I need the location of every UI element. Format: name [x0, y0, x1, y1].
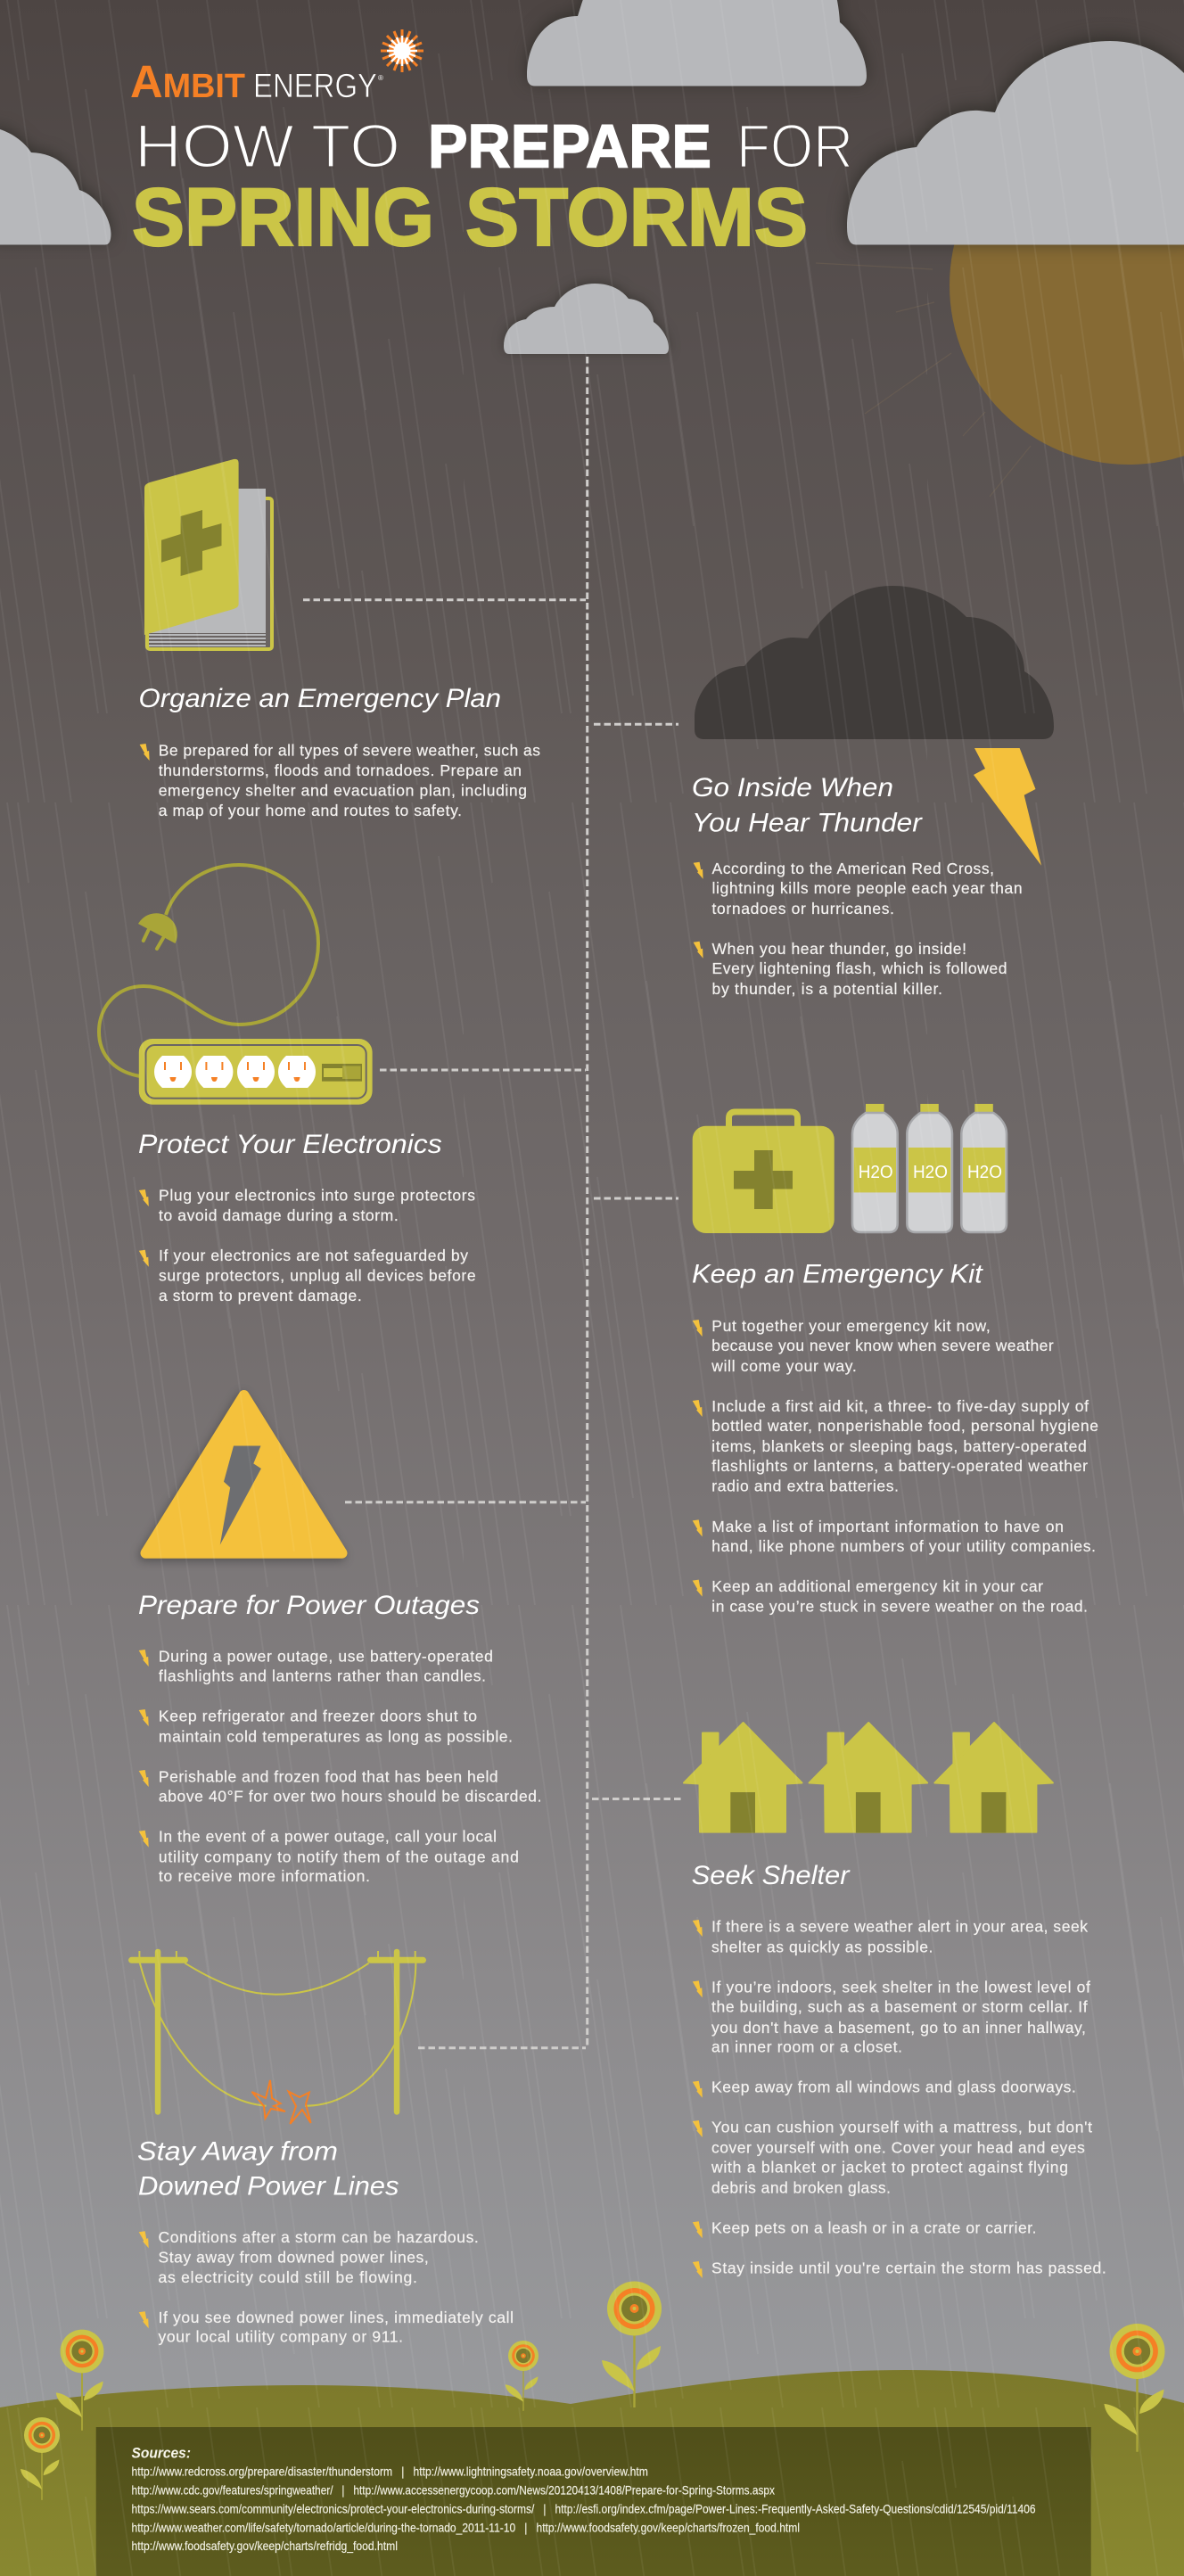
- heading: Go Inside When: [692, 773, 893, 802]
- logo: Ambit Energy: [130, 29, 423, 107]
- flower: [602, 2281, 662, 2407]
- bullet: During a power outage, use battery-operated: [159, 1647, 493, 1665]
- cloud: top center: [527, 0, 867, 86]
- sources list: http://www.cdc.gov/features/springweather/ | http://www.accessenergycoop.com/News/20120413/1408/Prepare-for-Spring-Storms.aspx: [132, 2483, 775, 2498]
- bullet: a map of your home and routes to safety.: [159, 802, 462, 819]
- bullet: will come your way.: [711, 1357, 857, 1375]
- bullet: the building, such as a basement or storm cellar. If: [711, 1998, 1088, 2016]
- sources list: https://www.sears.com/community/electronics/protect-your-electronics-during-storms/ | http://esfi.org/index.cfm/page/Power-Lines:-Frequently-Asked-Safety-Questions/cdid/12545/pid/11406: [132, 2501, 1036, 2515]
- bullet: a storm to prevent damage.: [159, 1287, 362, 1304]
- icon: warning triangle: [146, 1395, 342, 1553]
- flower: [56, 2330, 103, 2431]
- bullet: [139, 1767, 541, 1806]
- bullet: [693, 1918, 1088, 1956]
- bullet: lightning kills more people each year than: [711, 879, 1023, 897]
- bullet: flashlights and lanterns rather than candles.: [159, 1667, 486, 1685]
- bullet: If your electronics are not safeguarded by: [159, 1247, 468, 1264]
- panel: organize an emergency plan: [139, 459, 540, 819]
- bullet: Plug your electronics into surge protectors: [159, 1187, 475, 1205]
- bullet: According to the American Red Cross,: [711, 860, 994, 877]
- bullet: [139, 2228, 479, 2286]
- panel: stay away from downed power lines: [128, 1949, 514, 2346]
- icon: utility poles and wires: [128, 1949, 426, 2124]
- heading: You Hear Thunder: [692, 809, 923, 838]
- bullet: surge protectors, unplug all devices before: [159, 1267, 476, 1285]
- sources list: http://www.redcross.org/prepare/disaster/thunderstorm | http://www.lightningsafety.noaa.gov/overview.htm: [132, 2465, 648, 2479]
- bullet: as electricity could still be flowing.: [159, 2268, 417, 2286]
- bullet: Keep away from all windows and glass doorways.: [711, 2078, 1076, 2096]
- panel: keep an emergency kit: [692, 1104, 1098, 1616]
- bullet: You can cushion yourself with a mattress, but don't: [711, 2118, 1092, 2136]
- bullet: [140, 742, 540, 819]
- bullet: radio and extra batteries.: [711, 1477, 899, 1495]
- bullet: to receive more information.: [159, 1867, 370, 1885]
- bullet: tornadoes or hurricanes.: [711, 900, 894, 918]
- flower: [506, 2341, 539, 2411]
- bullet: Conditions after a storm can be hazardous.: [159, 2228, 479, 2246]
- bullet: shelter as quickly as possible.: [711, 1938, 933, 1956]
- bullet: Make a list of important information to have on: [711, 1518, 1064, 1535]
- flower: [21, 2417, 60, 2500]
- bullet: emergency shelter and evacuation plan, including: [159, 782, 527, 800]
- heading: Organize an Emergency Plan: [139, 684, 501, 713]
- sun: [816, 106, 1184, 497]
- logo: Ambit Energy: ®: [378, 74, 383, 82]
- bullet: in case you’re stuck in severe weather on the road.: [711, 1598, 1088, 1616]
- bullet: [693, 1317, 1054, 1375]
- bullet: [693, 1577, 1088, 1616]
- icon: first aid kit: [693, 1112, 835, 1233]
- bullet: flashlights or lanterns, a battery-operated weather: [711, 1457, 1088, 1475]
- logo wordmark: AMBIT: [130, 56, 245, 107]
- heading: Seek Shelter: [692, 1861, 851, 1890]
- bullet: utility company to notify them of the outage and: [159, 1848, 519, 1865]
- bullet: If you’re indoors, seek shelter in the lowest level of: [711, 1978, 1090, 1996]
- flower: [1104, 2324, 1164, 2452]
- bullet: Every lightening flash, which is followed: [711, 959, 1007, 977]
- sources list: http://www.foodsafety.gov/keep/charts/refridg_food.html: [132, 2539, 398, 2553]
- cloud: left: [0, 129, 111, 244]
- bullet: hand, like phone numbers of your utility companies.: [711, 1537, 1096, 1555]
- hill: [0, 2370, 1184, 2576]
- panel: prepare for power outages: [138, 1395, 542, 1885]
- bullet: [139, 1707, 513, 1745]
- panel: protect your electronics: [99, 865, 476, 1304]
- bullet: [139, 1187, 475, 1224]
- icon: lightning bolt: [974, 748, 1041, 866]
- icon: surge protector: [99, 865, 373, 1105]
- logo sun mark: [381, 29, 423, 72]
- bullet: bottled water, nonperishable food, personal hygiene: [711, 1417, 1098, 1435]
- bullet: by thunder, is a potential killer.: [711, 980, 942, 998]
- bullet: maintain cold temperatures as long as possible.: [159, 1727, 513, 1745]
- cloud: top right: [847, 41, 1184, 244]
- bullet: When you hear thunder, go inside!: [711, 940, 966, 958]
- bullet: [693, 1978, 1090, 2055]
- heading: Protect Your Electronics: [138, 1130, 442, 1159]
- sources list: http://www.weather.com/life/safety/tornado/article/during-the-tornado_2011-11-10 | http://www.foodsafety.gov/keep/charts/frozen_food.html: [132, 2520, 800, 2534]
- heading: Keep an Emergency Kit: [692, 1260, 983, 1289]
- bullet: Keep refrigerator and freezer doors shut to: [159, 1707, 477, 1724]
- icon: water bottles: H2O: [859, 1163, 893, 1182]
- icon: three houses: [684, 1723, 1053, 1833]
- bullet: with a blanket or jacket to protect against flying: [711, 2159, 1068, 2177]
- bullet: Put together your emergency kit now,: [711, 1317, 991, 1335]
- heading: [137, 2137, 399, 2202]
- icon: storm cloud: [695, 586, 1054, 739]
- sources heading: Sources:: [132, 2446, 191, 2462]
- bullet: Be prepared for all types of severe weather, such as: [159, 742, 540, 760]
- bullet: Keep pets on a leash or in a crate or carrier.: [711, 2219, 1036, 2237]
- bullet: [139, 1647, 493, 1685]
- bullet: an inner room or a closet.: [711, 2037, 902, 2055]
- title: STORMS: [465, 172, 808, 263]
- bullet: In the event of a power outage, call your local: [159, 1827, 497, 1845]
- bullet: debris and broken glass.: [711, 2178, 891, 2196]
- title: FOR: [736, 112, 853, 180]
- heading: Prepare for Power Outages: [138, 1591, 480, 1620]
- bullet: to avoid damage during a storm.: [159, 1206, 399, 1224]
- panel: go inside when you hear thunder: [692, 586, 1054, 998]
- icon: sparks: [251, 2080, 311, 2124]
- title: PREPARE: [428, 112, 711, 180]
- bullet: because you never know when severe weather: [711, 1337, 1054, 1354]
- bullet: [693, 2118, 1092, 2196]
- bullet: Stay away from downed power lines,: [159, 2249, 429, 2267]
- bullet: Perishable and frozen food that has been held: [159, 1767, 498, 1785]
- bullet: [694, 860, 1023, 918]
- bullet: [693, 1397, 1098, 1495]
- bullet: If you see downed power lines, immediately call: [159, 2309, 514, 2326]
- bullet: you don't have a basement, go to an inner hallway,: [711, 2019, 1086, 2037]
- title: SPRING: [132, 172, 434, 263]
- bullet: [693, 1518, 1096, 1555]
- bullet: Keep an additional emergency kit in your car: [711, 1577, 1043, 1595]
- bullet: above 40°F for over two hours should be discarded.: [159, 1788, 542, 1806]
- bullet: If there is a severe weather alert in your area, seek: [711, 1918, 1088, 1936]
- bullet: items, blankets or sleeping bags, battery-operated: [711, 1437, 1087, 1455]
- title: [132, 112, 853, 263]
- icon: emergency plan book: [144, 459, 272, 649]
- title: HOW TO: [135, 112, 400, 180]
- bullet: Include a first aid kit, a three- to five-day supply of: [711, 1397, 1089, 1415]
- heading: Downed Power Lines: [138, 2172, 399, 2202]
- bullet: [694, 940, 1007, 998]
- bullet: thunderstorms, floods and tornadoes. Prepare an: [159, 761, 522, 779]
- panel: sources: [96, 2427, 1091, 2576]
- cloud: small center: [504, 284, 669, 354]
- icon: water bottles: [852, 1104, 1007, 1232]
- bullet: cover yourself with one. Cover your head and eyes: [711, 2139, 1085, 2157]
- sources list: [132, 2465, 1036, 2553]
- heading: Stay Away from: [137, 2137, 338, 2167]
- heading: [692, 773, 923, 838]
- bullet: your local utility company or 911.: [159, 2328, 403, 2346]
- bullet: Stay inside until you're certain the storm has passed.: [711, 2259, 1106, 2276]
- panel: seek shelter: [684, 1723, 1106, 2278]
- bullet: [139, 1247, 476, 1304]
- dashed timeline: [303, 357, 683, 2048]
- icon: water bottles: H2O: [967, 1163, 1002, 1182]
- bullet: [139, 2309, 514, 2346]
- bullet: [139, 1827, 519, 1885]
- logo: Ambit Energy: ENERGY: [253, 68, 377, 105]
- icon: water bottles: H2O: [913, 1163, 948, 1182]
